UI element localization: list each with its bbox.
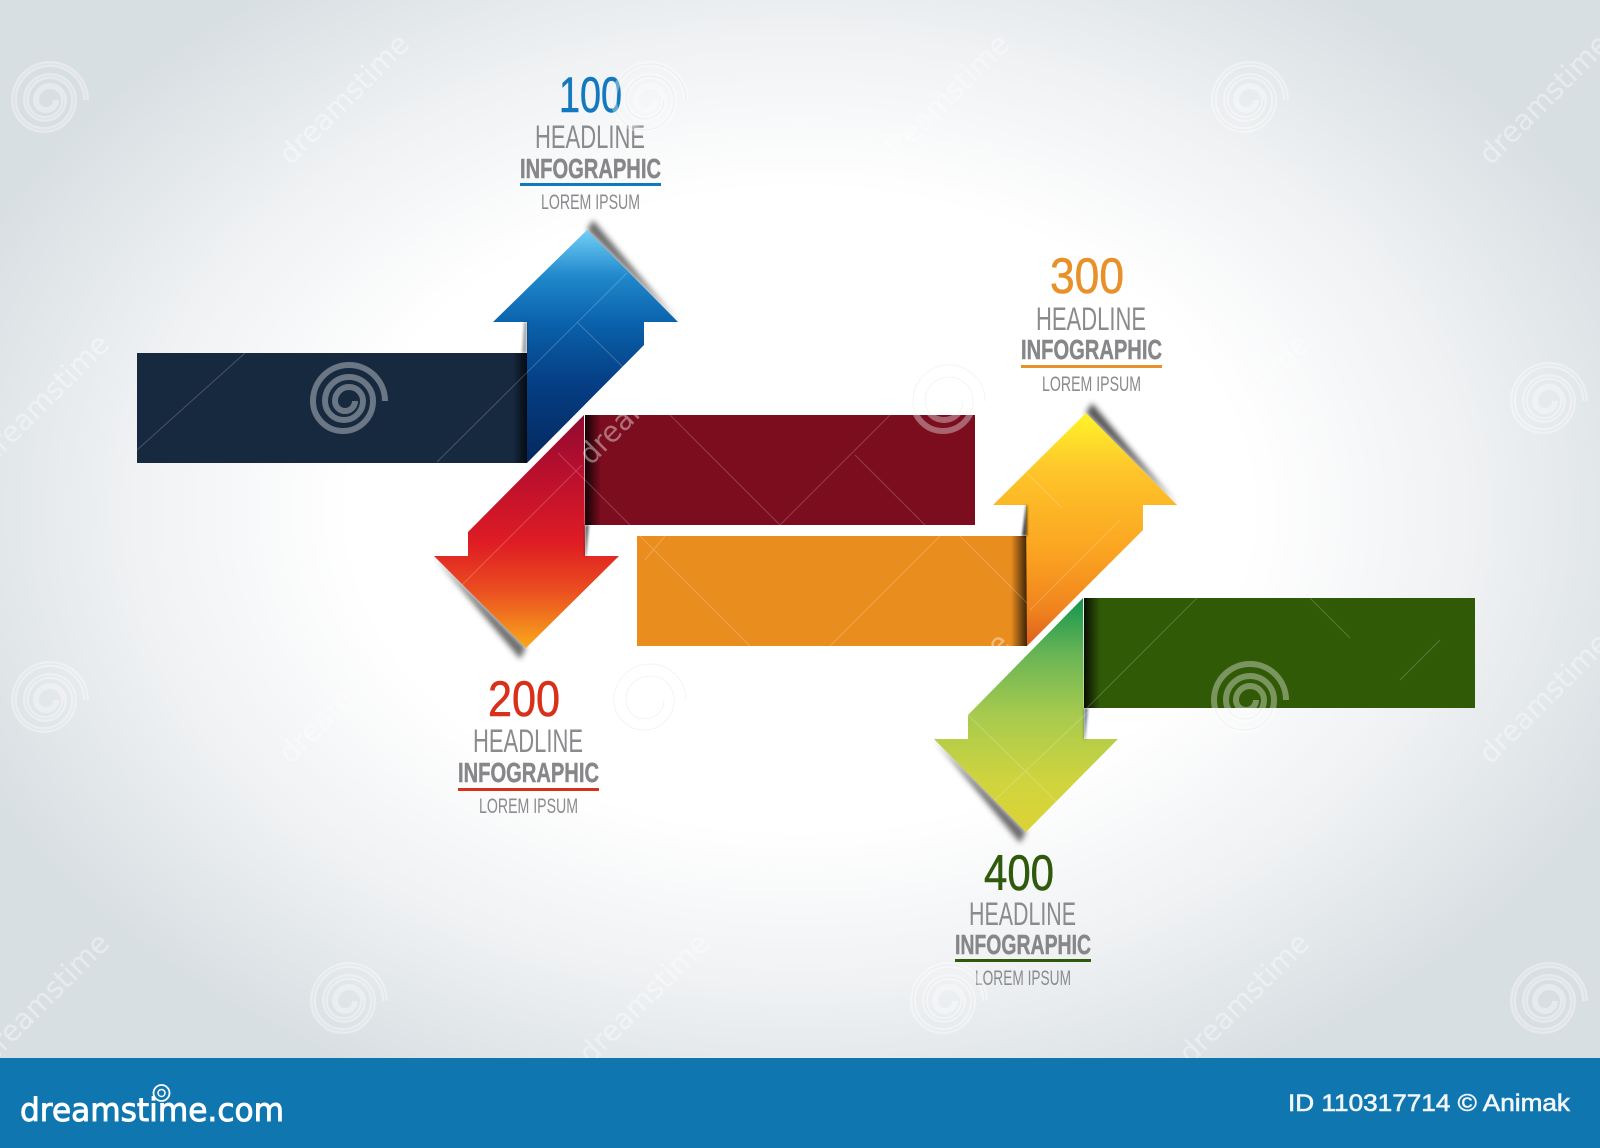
label block 300: INFOGRAPHIC <box>1021 334 1162 365</box>
footer bar <box>0 1058 1600 1148</box>
label block 200 <box>458 671 599 818</box>
lime stem crease <box>1084 708 1088 739</box>
label block 300: LOREM IPSUM <box>1042 373 1141 396</box>
blue stem crease <box>522 322 527 353</box>
yellow arrow <box>993 413 1177 646</box>
label block 100: 100 <box>559 67 622 123</box>
arrow 2: maroon band and red down arrow <box>434 415 975 659</box>
label block 200: 200 <box>488 671 560 727</box>
blue arrow <box>493 230 678 463</box>
lime arrow <box>934 598 1118 832</box>
dreamstime diagonal wordmarks: dreamstime <box>1172 926 1316 1070</box>
label block 100: INFOGRAPHIC <box>520 153 661 184</box>
label block 300: 300 <box>1050 248 1124 304</box>
image id and credit: ID 110317714 © Animak <box>1288 1090 1571 1117</box>
label block 100: LOREM IPSUM <box>541 191 640 214</box>
orange band <box>637 536 1027 646</box>
label block 200: LOREM IPSUM <box>479 795 578 818</box>
lime arrow tip shadow <box>934 739 1026 843</box>
fold shadow on orange band <box>1011 536 1027 646</box>
green band <box>1084 598 1475 708</box>
dreamstime diagonal wordmarks: dreamstime <box>272 27 416 171</box>
label block 300: HEADLINE <box>1036 301 1146 337</box>
arrow 1: navy band and blue up arrow <box>137 220 678 463</box>
label block 200: HEADLINE <box>473 723 583 759</box>
dreamstime diagonal wordmarks: dreamstime <box>872 626 1016 770</box>
red stem crease <box>585 525 589 556</box>
footer logo: dreamstime.com <box>20 1091 284 1129</box>
dreamstime diagonal wordmarks: dreamstime <box>1172 327 1316 471</box>
maroon band <box>585 415 975 525</box>
label block 400: 400 <box>984 845 1054 901</box>
dreamstime diagonal wordmarks: dreamstime <box>572 926 716 1070</box>
yellow arrow tip shadow <box>1086 403 1177 505</box>
yellow stem crease <box>1022 505 1027 536</box>
label block 300 <box>1021 248 1162 396</box>
dreamstime diagonal wordmarks: dreamstime <box>572 327 716 471</box>
arrow 3: orange band and yellow up arrow <box>637 403 1177 646</box>
red arrow tip shadow <box>434 556 526 659</box>
dreamstime diagonal wordmarks: dreamstime <box>872 27 1016 171</box>
label block 400 <box>955 845 1091 990</box>
dreamstime diagonal wordmarks: dreamstime <box>272 626 416 770</box>
label block 400: INFOGRAPHIC <box>955 929 1091 960</box>
label block 400: LOREM IPSUM <box>975 967 1071 990</box>
navy band <box>137 353 527 463</box>
label block 200: INFOGRAPHIC <box>458 757 599 788</box>
red arrow <box>434 415 619 648</box>
label block 100 <box>520 67 661 214</box>
label block 100: HEADLINE <box>535 119 645 155</box>
fold shadow on green band <box>1084 598 1100 708</box>
label block 400: HEADLINE <box>969 896 1076 932</box>
fold shadow on maroon band <box>585 415 601 525</box>
fold shadow on navy band <box>513 353 527 463</box>
arrow 4: green band and lime down arrow <box>934 598 1475 843</box>
blue arrow tip shadow <box>587 220 678 322</box>
